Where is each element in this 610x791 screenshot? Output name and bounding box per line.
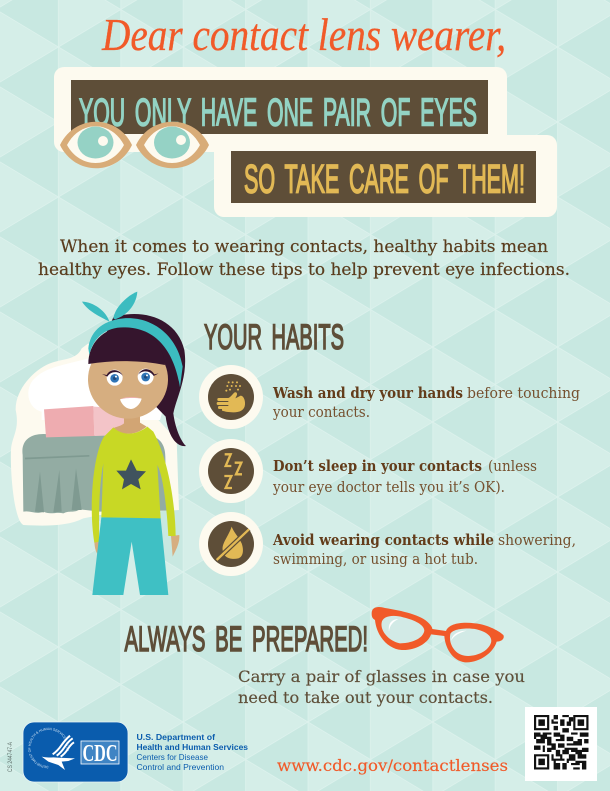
illustration: bed — [11, 343, 179, 526]
heading: your habits: YOUR HABITS — [204, 318, 344, 357]
habit text: wash hands: Wash and dry your hands — [272, 385, 463, 402]
habit text: avoid water: showering, — [498, 533, 576, 549]
intro text: When it comes to wearing contacts, healthy habits mean — [60, 237, 548, 256]
intro text: healthy eyes. Follow these tips to help prevent eye infections. — [38, 260, 570, 279]
habit text: avoid water — [272, 532, 576, 568]
logo: HHS CDC: CDC — [82, 741, 118, 767]
title: Dear contact lens wearer, — [101, 10, 506, 60]
logo: HHS CDC — [22, 722, 128, 782]
icon: pair of eyes — [60, 122, 209, 168]
print code: CS 244747-A — [8, 742, 14, 772]
text: department name: Centers for Disease — [136, 752, 208, 762]
heading: always be prepared: ALWAYS BE PREPARED! — [124, 620, 368, 659]
icon: washing hands — [199, 365, 263, 429]
habit text: avoid water: Avoid wearing contacts while — [272, 532, 494, 549]
illustration: girl character — [82, 292, 186, 595]
icon: no water — [199, 512, 263, 576]
banner: so take care of them — [214, 135, 557, 217]
text: department name: Control and Prevention — [136, 762, 224, 772]
habit text: do not sleep: Don’t sleep in your contacts — [273, 458, 482, 475]
text: department name — [136, 732, 248, 772]
QR code — [525, 707, 597, 781]
website url: www.cdc.gov/contactlenses — [277, 756, 508, 775]
icon: orange glasses — [372, 607, 504, 662]
habit text: wash hands: before touching — [467, 386, 580, 402]
habit text: do not sleep: your eye doctor tells you it’s OK). — [272, 480, 505, 496]
habit text: do not sleep: (unless — [488, 459, 537, 475]
habit text: avoid water: swimming, or using a hot tub. — [273, 552, 478, 568]
habit text: do not sleep — [272, 458, 537, 496]
text: department name: U.S. Department of — [136, 732, 215, 742]
text: carry glasses — [238, 667, 525, 707]
icon: sleep zzz — [199, 439, 263, 503]
text: department name: Health and Human Services — [136, 742, 248, 752]
text: carry glasses: need to take out your contacts. — [238, 688, 493, 707]
habit text: wash hands — [272, 385, 580, 421]
logo: HHS CDC: DEPARTMENT OF HEALTH & HUMAN SERVICES · USA — [28, 728, 69, 768]
habit text: wash hands: your contacts. — [272, 405, 370, 421]
banner: you only have one pair of eyes — [54, 67, 507, 152]
intro text — [38, 237, 570, 279]
text: carry glasses: Carry a pair of glasses in case you — [238, 667, 525, 686]
